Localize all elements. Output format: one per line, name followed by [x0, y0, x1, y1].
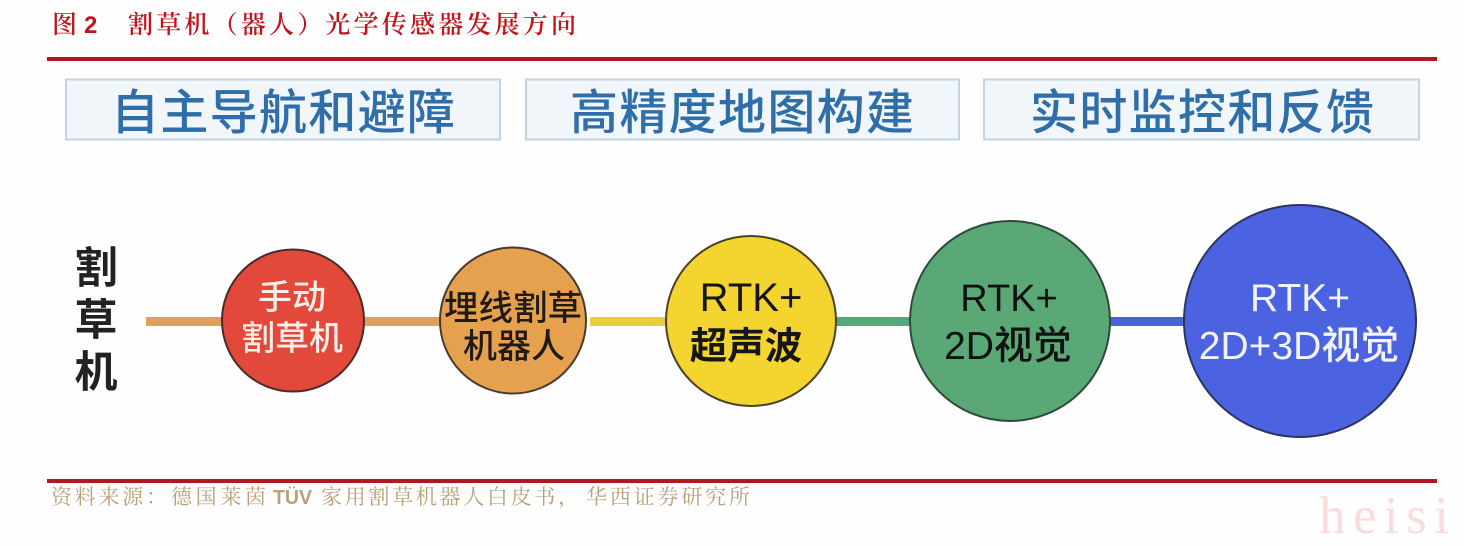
stage 2: buried-wire mower robot: [440, 248, 586, 394]
panel: real-time monitoring and feedback: 实时监控和反馈: [1030, 87, 1374, 140]
source note: 华西证券研究所: [586, 485, 750, 509]
source note: 德国莱茵: [171, 485, 266, 509]
source note: TÜV: [273, 486, 313, 509]
stage 3: RTK + ultrasonic: [666, 236, 836, 406]
stage 1: manual mower: 割草机: [241, 320, 343, 358]
stage 4: RTK + 2D vision: 2D视觉: [944, 325, 1072, 368]
stage 5: RTK + 2D + 3D vision: [1184, 205, 1416, 437]
stage 4: RTK + 2D vision: RTK+: [960, 278, 1058, 320]
stage 3: RTK + ultrasonic: RTK+: [700, 276, 802, 320]
timeline connector: [146, 317, 1188, 326]
vertical label: mower: 割: [74, 245, 118, 293]
panel: autonomous navigation and obstacle avoidance: [66, 80, 500, 140]
watermark: heisi: [1319, 487, 1449, 545]
stage 3: RTK + ultrasonic: 超声波: [690, 325, 802, 367]
source note: 资料来源：: [51, 485, 167, 509]
vertical label: mower: 机: [74, 349, 118, 397]
vertical label: mower: 草: [74, 297, 118, 345]
stage 4: RTK + 2D vision: [910, 221, 1110, 421]
panel: high precision map building: 高精度地图构建: [570, 87, 914, 140]
panel: real-time monitoring and feedback: [984, 80, 1419, 140]
panel: high precision map building: [526, 80, 959, 140]
title: 图: [52, 11, 77, 39]
stage 2: buried-wire mower robot: 机器人: [463, 328, 565, 366]
title: 割草机（器人）光学传感器发展方向: [128, 11, 576, 39]
title: 2: [84, 12, 97, 39]
source note: [51, 485, 750, 510]
source note: 家用割草机器人白皮书，: [321, 485, 579, 510]
stage 1: manual mower: 手动: [258, 279, 326, 317]
panel: autonomous navigation and obstacle avoidance: 自主导航和避障: [111, 87, 455, 140]
stage 5: RTK + 2D + 3D vision: 2D+3D视觉: [1199, 325, 1399, 368]
stage 5: RTK + 2D + 3D vision: RTK+: [1250, 277, 1350, 320]
stage 1: manual mower: [222, 250, 364, 392]
stage 2: buried-wire mower robot: 埋线割草: [444, 290, 582, 328]
vertical label: mower: [74, 245, 118, 397]
